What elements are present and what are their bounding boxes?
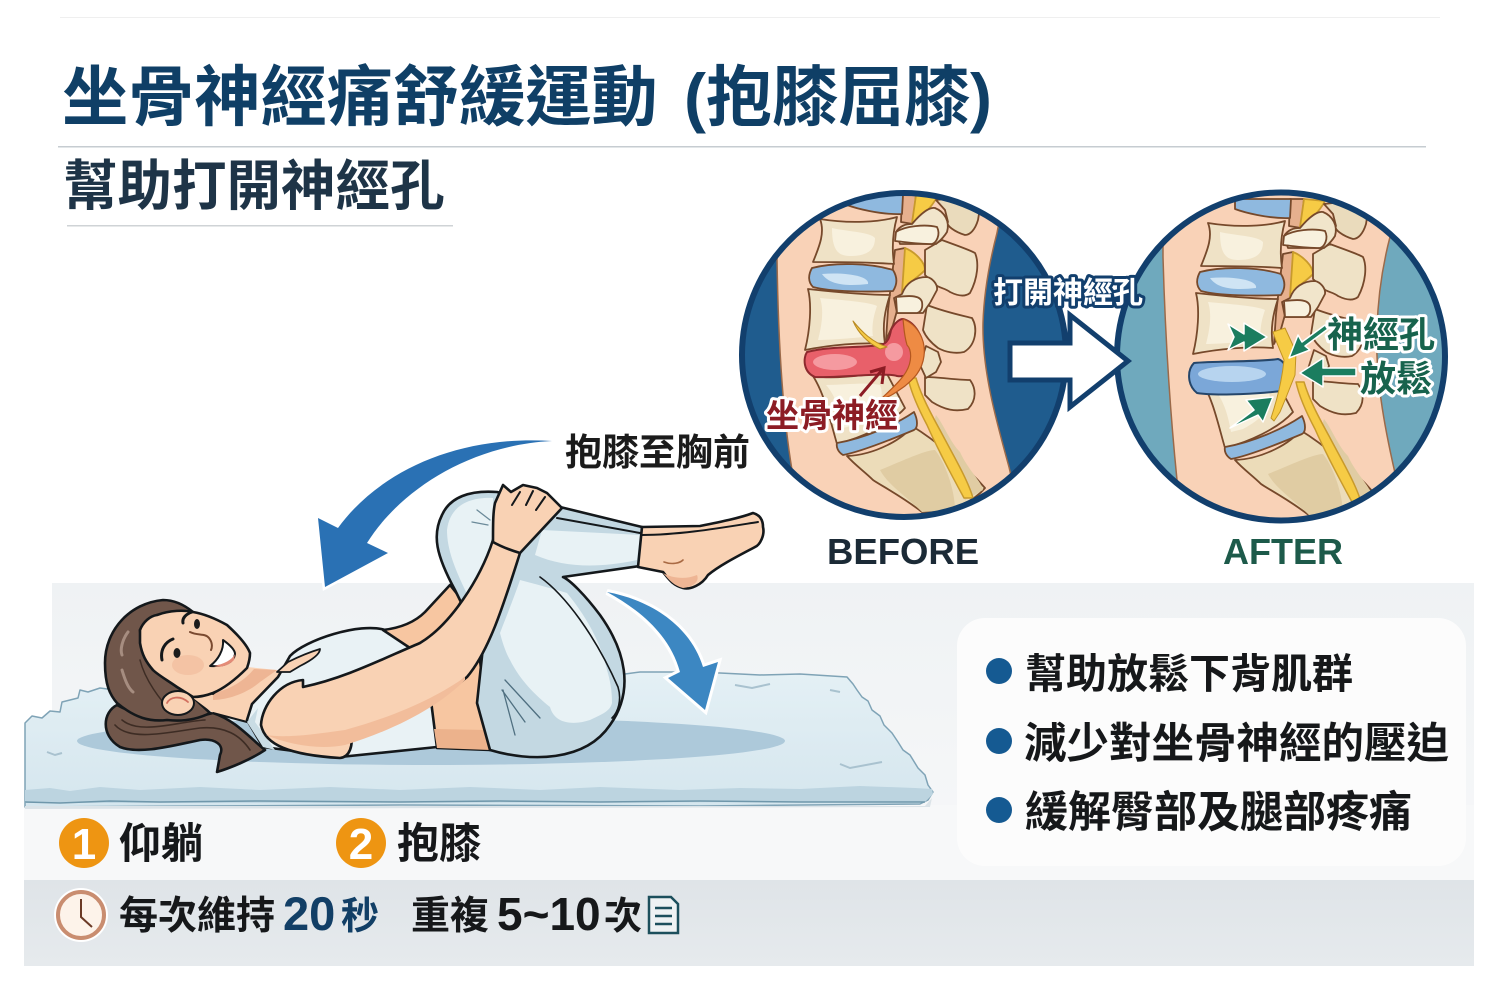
floor panel	[52, 583, 1474, 880]
before label: BEFORE	[827, 531, 979, 572]
duration text	[119, 887, 379, 940]
title: 坐骨神經痛舒緩運動	[62, 61, 658, 135]
far arm	[383, 585, 462, 655]
main arm	[261, 540, 520, 758]
title: (抱膝屈膝)	[684, 60, 992, 134]
repeat text: 次	[604, 896, 642, 938]
step 1	[59, 818, 203, 869]
benefits card: 緩解臀部及腿部疼痛	[1025, 789, 1412, 837]
label: foramen relaxed	[1327, 314, 1435, 399]
hair cap	[105, 600, 210, 721]
label: sciatic nerve	[766, 368, 898, 434]
ear	[162, 691, 194, 715]
label: foramen relaxed: 放鬆	[1360, 358, 1432, 399]
after circle: opened foramen	[1117, 190, 1445, 528]
after label: AFTER	[1223, 531, 1343, 572]
arrow: legs downward	[607, 592, 718, 710]
subtitle: 幫助打開神經孔	[63, 156, 445, 217]
step 1: 1	[72, 820, 96, 869]
herniated disc in red	[805, 319, 924, 399]
repeat text: 5~10	[497, 888, 601, 940]
belly	[430, 660, 490, 750]
arrow: pull knees to chest	[318, 440, 552, 587]
foot	[638, 513, 763, 588]
before circle: compressed nerve	[742, 190, 1066, 525]
repeat text	[411, 888, 642, 940]
duration text: 20	[283, 887, 335, 940]
top	[247, 628, 440, 757]
step 2: 2	[349, 820, 373, 869]
benefits card: 減少對坐骨神經的壓迫	[1024, 721, 1449, 768]
label: hug knees to chest: 抱膝至胸前	[565, 432, 750, 473]
face	[140, 611, 250, 715]
woman hugging knees	[105, 485, 763, 772]
label: open the foramen: 打開神經孔	[993, 277, 1143, 310]
label: sciatic nerve: 坐骨神經	[766, 397, 898, 434]
hair tail	[106, 705, 265, 772]
duration text: 秒	[341, 896, 379, 938]
label: foramen relaxed: 神經孔	[1327, 314, 1435, 355]
benefits card	[957, 618, 1466, 866]
title	[62, 60, 992, 135]
icon: document	[649, 897, 678, 933]
green foramen arrows	[1228, 323, 1356, 428]
benefits card: 幫助放鬆下背肌群	[1025, 651, 1353, 697]
duration text: 每次維持	[119, 895, 275, 938]
exercise mat	[25, 672, 933, 809]
big before-to-after arrow	[1010, 315, 1128, 407]
repeat text: 重複	[411, 895, 489, 938]
step 1: 仰躺	[119, 820, 203, 867]
neck and chest	[193, 667, 300, 730]
hand	[493, 485, 562, 553]
legs	[437, 492, 642, 757]
step 2: 抱膝	[397, 820, 481, 867]
icon: clock	[54, 888, 108, 942]
step 2	[336, 818, 481, 869]
relaxed disc in blue	[1189, 328, 1296, 421]
bottom bar	[24, 880, 1474, 966]
